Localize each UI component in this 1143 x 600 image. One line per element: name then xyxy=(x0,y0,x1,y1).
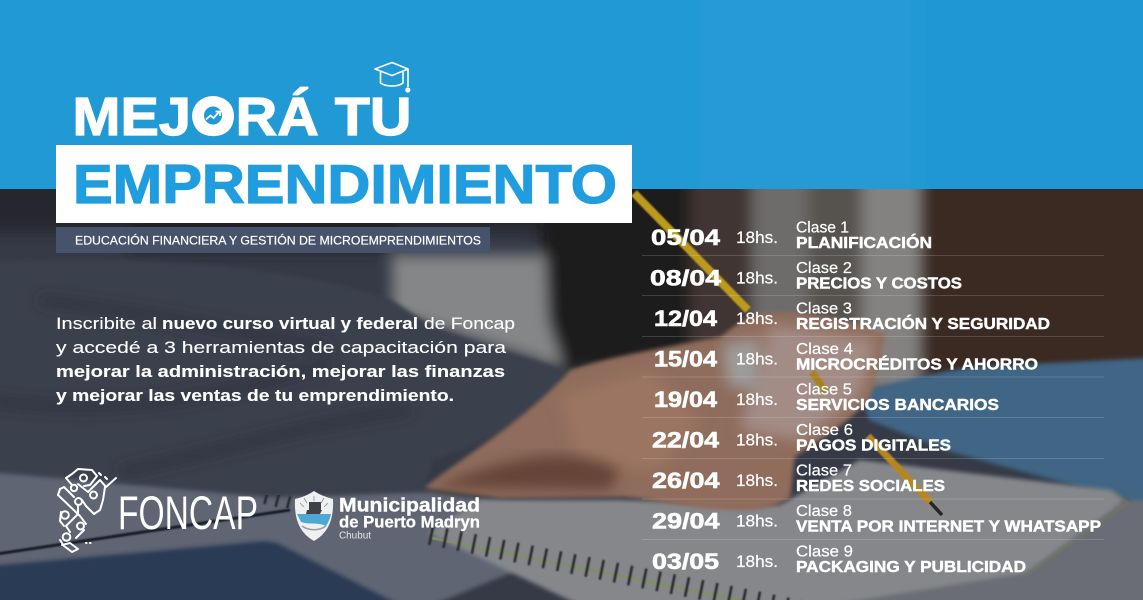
row 4: MICROCRÉDITOS Y AHORRO xyxy=(796,354,1038,374)
row 1 xyxy=(651,220,932,252)
icon: graduation cap xyxy=(375,62,410,92)
row 9: 18hs. xyxy=(736,552,778,571)
row 7: 26/04 xyxy=(652,468,720,493)
title: Mejorá tu: MEJORÁ TU xyxy=(72,87,412,147)
row 8: 18hs. xyxy=(736,512,778,530)
intro paragraph xyxy=(56,315,515,405)
sweater xyxy=(0,260,565,497)
row 8: 29/04 xyxy=(652,508,720,534)
subtitle bar: EDUCACIÓN FINANCIERA Y GESTIÓN DE MICROEMPRENDIMIENTOS xyxy=(75,232,481,248)
row 6: 22/04 xyxy=(652,428,720,452)
row 9: 03/05 xyxy=(652,549,719,574)
intro paragraph: y accedé a 3 herramientas de capacitación para xyxy=(56,339,507,357)
row 3 xyxy=(654,301,1050,333)
row 3: REGISTRACIÓN Y SEGURIDAD xyxy=(796,314,1050,333)
notebook spiral xyxy=(432,538,800,600)
row 9 xyxy=(652,544,1026,576)
lower right corner xyxy=(790,500,1143,600)
row 1: PLANIFICACIÓN xyxy=(796,233,932,252)
subtitle bar xyxy=(56,227,490,253)
row 5 xyxy=(654,382,999,414)
wordmark: FONCAP xyxy=(118,486,258,539)
row 2: 08/04 xyxy=(650,266,722,290)
intro paragraph: y mejorar las ventas de tu emprendimiento. xyxy=(56,387,454,405)
logo: Municipalidad de Puerto Madryn: Chubut xyxy=(339,530,371,542)
row 2 xyxy=(650,260,962,292)
icon: growth arrow inside the letter O xyxy=(192,96,234,136)
blue header band xyxy=(0,0,1143,189)
row 2: Clase 2 xyxy=(796,260,852,277)
pencil xyxy=(634,193,748,310)
title box: Emprendimiento xyxy=(56,145,632,223)
row 4: 18hs. xyxy=(736,350,778,368)
row 8 xyxy=(652,503,1101,536)
wordmark: Municipalidad xyxy=(339,496,480,517)
intro paragraph: mejorar la administración, mejorar las finanzas xyxy=(56,363,505,381)
row 7: REDES SOCIALES xyxy=(796,478,945,495)
row 4: Clase 4 xyxy=(796,341,853,358)
row 1: 05/04 xyxy=(651,225,721,250)
notebook pages xyxy=(428,460,1125,600)
class schedule xyxy=(642,220,1104,576)
row 5: Clase 5 xyxy=(796,382,852,399)
row 7 xyxy=(652,463,945,495)
icon: Foncap circuit map xyxy=(58,469,116,552)
row 5: 19/04 xyxy=(654,387,718,412)
intro paragraph: de Foncap xyxy=(424,315,515,333)
row 8: Clase 8 xyxy=(796,503,852,520)
row 1: 18hs. xyxy=(736,228,778,247)
row 2: PRECIOS Y COSTOS xyxy=(796,276,962,292)
background photo: student writing in a notebook xyxy=(0,170,1143,600)
row 6: 18hs. xyxy=(736,430,778,450)
hand and arm xyxy=(424,312,885,510)
logo: Municipalidad de Puerto Madryn: de Puerto Madryn xyxy=(339,512,480,532)
row 4: 15/04 xyxy=(654,346,718,372)
intro paragraph: Inscribite al xyxy=(56,315,157,333)
row 9: PACKAGING Y PUBLICIDAD xyxy=(796,559,1026,576)
row 2: 18hs. xyxy=(736,268,778,288)
icon: municipal shield xyxy=(295,491,333,541)
row 5: 18hs. xyxy=(736,390,778,409)
jeans xyxy=(860,358,1143,520)
left sheets and tablet xyxy=(0,472,640,600)
row 6 xyxy=(652,422,951,454)
row 3: 18hs. xyxy=(736,309,778,328)
row 3: Clase 3 xyxy=(796,301,852,318)
logo: Foncap xyxy=(58,469,258,552)
row 6: Clase 6 xyxy=(796,422,853,439)
row 8: VENTA POR INTERNET Y WHATSAPP xyxy=(796,518,1101,536)
row 1: Clase 1 xyxy=(796,220,849,237)
row 5: SERVICIOS BANCARIOS xyxy=(796,397,999,414)
row 7: 18hs. xyxy=(736,471,778,490)
row 3: 12/04 xyxy=(654,306,718,331)
row 9: Clase 9 xyxy=(796,544,853,560)
row 4 xyxy=(654,341,1038,374)
row 7: Clase 7 xyxy=(796,463,852,480)
logo: Municipalidad de Puerto Madryn xyxy=(295,491,480,542)
title box: Emprendimiento: EMPRENDIMIENTO xyxy=(73,153,617,215)
row 6: PAGOS DIGITALES xyxy=(796,438,951,454)
intro paragraph: nuevo curso virtual y federal xyxy=(162,315,418,333)
